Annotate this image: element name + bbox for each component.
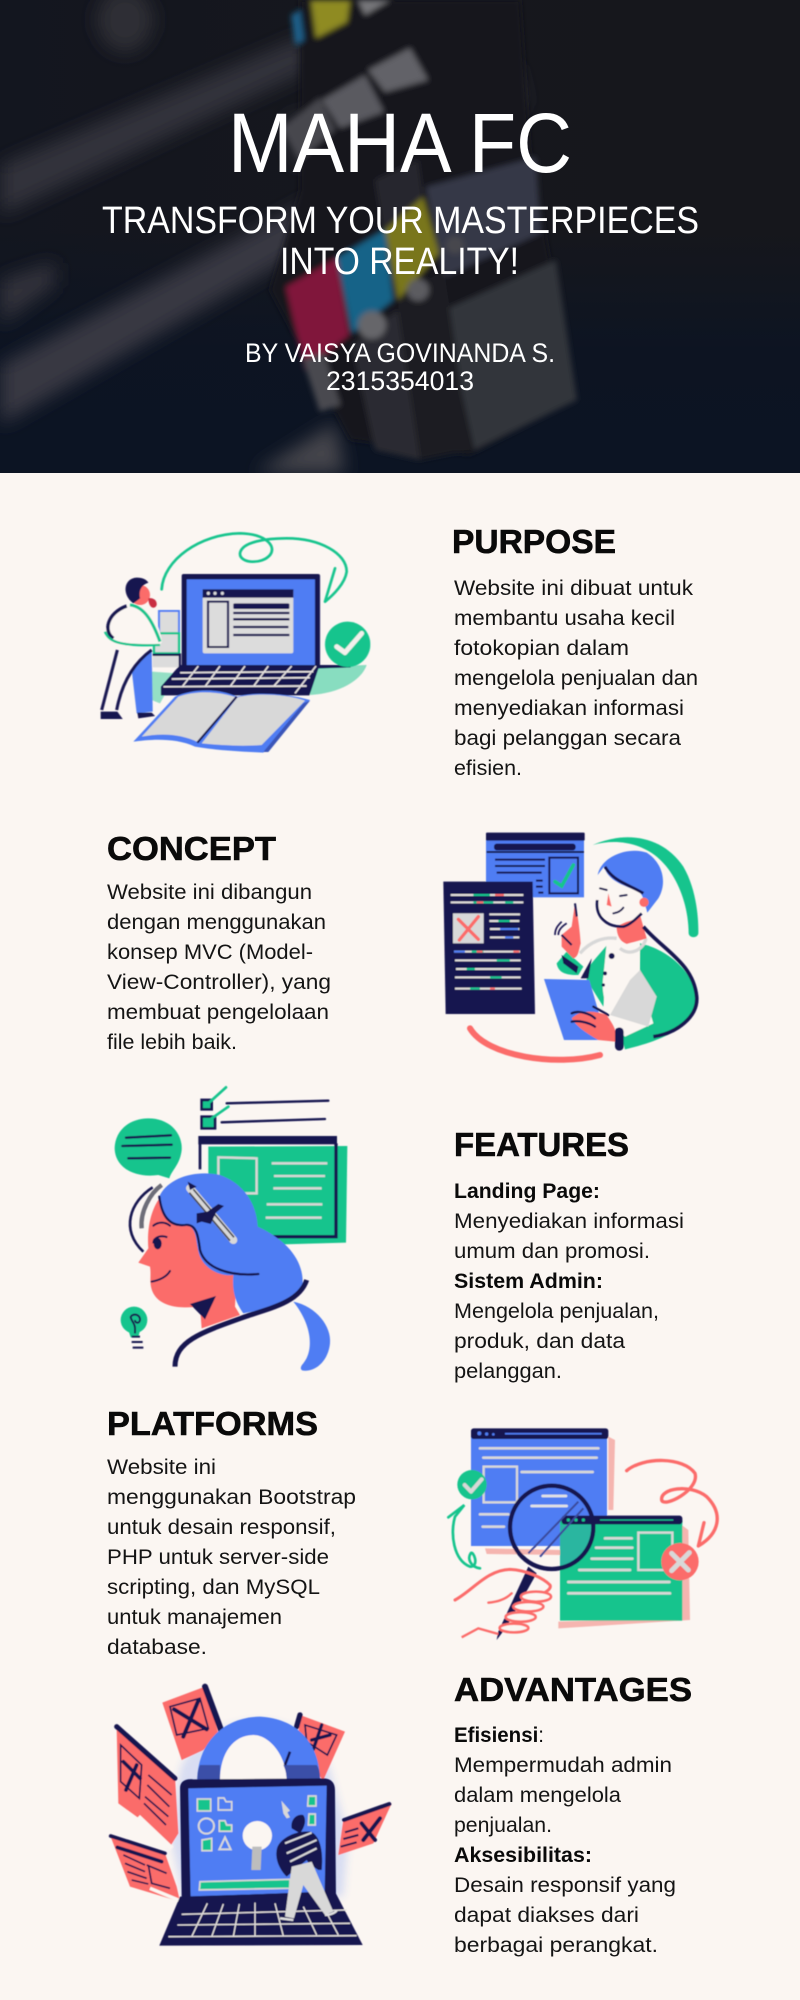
text: advantages body: dapat diakses dari bbox=[454, 1903, 639, 1927]
text: features body bbox=[454, 1179, 684, 1383]
text: purpose body: bagi pelanggan secara bbox=[454, 726, 681, 750]
text: advantages body: penjualan. bbox=[454, 1813, 552, 1837]
text: concept body: Website ini dibangun bbox=[107, 880, 312, 904]
text: features body: Landing Page: bbox=[454, 1179, 600, 1203]
text: advantages body: Desain responsif yang bbox=[454, 1873, 676, 1897]
text: platforms body: scripting, dan MySQL bbox=[107, 1575, 320, 1599]
text: concept body bbox=[107, 880, 331, 1054]
text: features body: produk, dan data bbox=[454, 1329, 625, 1353]
subtitle: INTO REALITY! bbox=[280, 241, 519, 283]
text: platforms body: menggunakan Bootstrap bbox=[107, 1485, 356, 1509]
subtitle bbox=[102, 200, 699, 283]
illustration: person with laptop and book bbox=[101, 533, 370, 753]
text: advantages body bbox=[454, 1723, 676, 1957]
text: features body: Sistem Admin: bbox=[454, 1269, 603, 1293]
hero background photo of printer bbox=[0, 0, 800, 473]
panel: concept bbox=[107, 830, 698, 1060]
text: concept body: membuat pengelolaan bbox=[107, 1000, 329, 1024]
author credit: 2315354013 bbox=[326, 366, 474, 396]
heading: platforms: PLATFORMS bbox=[107, 1405, 318, 1442]
text: features body: Menyediakan informasi bbox=[454, 1209, 684, 1233]
text: platforms body: untuk desain responsif, bbox=[107, 1515, 336, 1539]
text: platforms body bbox=[107, 1455, 356, 1659]
illustration: padlock laptop with rejected files bbox=[110, 1687, 392, 1946]
author credit: BY VAISYA GOVINANDA S. bbox=[245, 338, 555, 368]
text: purpose body: efisien. bbox=[454, 756, 522, 780]
text: purpose body: menyediakan informasi bbox=[454, 696, 684, 720]
text: purpose body bbox=[454, 576, 698, 780]
panel: platforms bbox=[107, 1405, 717, 1659]
panel: advantages bbox=[110, 1671, 692, 1957]
text: purpose body: mengelola penjualan dan bbox=[454, 666, 698, 690]
illustration: magnifier over web pages bbox=[448, 1428, 717, 1640]
text: platforms body: Website ini bbox=[107, 1455, 216, 1479]
text: platforms body: untuk manajemen bbox=[107, 1605, 282, 1629]
panel: features bbox=[115, 1087, 684, 1383]
illustration: thinking girl with pencil bbox=[115, 1087, 347, 1371]
text: platforms body: PHP untuk server-side bbox=[107, 1545, 329, 1569]
hero banner bbox=[0, 0, 800, 473]
subtitle: TRANSFORM YOUR MASTERPIECES bbox=[102, 200, 699, 242]
text: advantages body: dalam mengelola bbox=[454, 1783, 621, 1807]
text: advantages body: Efisiensi: bbox=[454, 1723, 544, 1747]
text: advantages body: berbagai perangkat. bbox=[454, 1933, 658, 1957]
author credit bbox=[245, 338, 555, 396]
heading: purpose: PURPOSE bbox=[452, 523, 616, 560]
text: platforms body: database. bbox=[107, 1635, 207, 1659]
heading: concept: CONCEPT bbox=[107, 830, 276, 867]
text: advantages body: Aksesibilitas: bbox=[454, 1843, 592, 1867]
heading: advantages: ADVANTAGES bbox=[454, 1671, 692, 1708]
text: purpose body: membantu usaha kecil bbox=[454, 606, 675, 630]
illustration: woman reviewing documents bbox=[443, 833, 698, 1060]
text: features body: umum dan promosi. bbox=[454, 1239, 650, 1263]
text: concept body: file lebih baik. bbox=[107, 1030, 237, 1054]
text: concept body: dengan menggunakan bbox=[107, 910, 326, 934]
heading: features: FEATURES bbox=[454, 1126, 629, 1163]
text: features body: Mengelola penjualan, bbox=[454, 1299, 659, 1323]
text: advantages body: Mempermudah admin bbox=[454, 1753, 672, 1777]
text: concept body: View-Controller), yang bbox=[107, 970, 331, 994]
text: features body: pelanggan. bbox=[454, 1359, 562, 1383]
text: concept body: konsep MVC (Model- bbox=[107, 940, 313, 964]
panel: purpose bbox=[101, 523, 698, 780]
text: purpose body: fotokopian dalam bbox=[454, 636, 629, 660]
text: purpose body: Website ini dibuat untuk bbox=[454, 576, 693, 600]
title: MAHA FC bbox=[228, 96, 572, 190]
